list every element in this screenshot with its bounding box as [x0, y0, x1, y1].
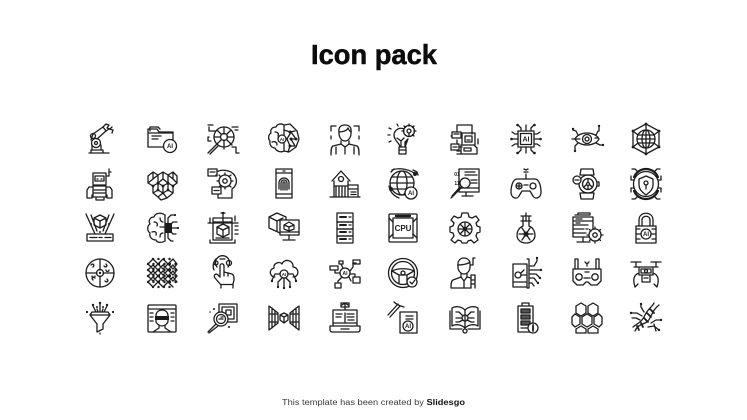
icon: globe web: [632, 123, 660, 155]
icon: AI hub: AI: [342, 271, 348, 277]
icon: hexagon cells: [572, 303, 602, 333]
icon: magnifier over chip: [208, 304, 237, 333]
icon: phone fingerprint: [276, 169, 292, 198]
icon: lightbulb with gear: [388, 124, 416, 154]
icon: AI book: [450, 307, 480, 333]
icon: half brain circuit: [148, 213, 179, 242]
icon: drone remote: [573, 259, 601, 285]
icon: AI padlock: AI: [643, 232, 649, 238]
icon: cube and monitor: [269, 213, 299, 240]
icon: dot mesh: [148, 259, 177, 287]
icon: robot: [87, 169, 112, 200]
icon: cube with data wings: [269, 306, 299, 330]
icon: hexagon mesh: [148, 172, 177, 200]
icon: AI folder: AI: [167, 144, 173, 150]
icon: AI padlock: [636, 213, 656, 243]
icon: person with antenna: [451, 258, 475, 288]
icon: brain with mesh: AI: [280, 137, 284, 142]
icon: shield circuit: [631, 169, 661, 199]
icon: VR person screen: [148, 305, 176, 332]
icon: 3D printer: [208, 212, 238, 243]
icon: flask with network: [517, 213, 535, 243]
icon: AI cloud: [270, 260, 298, 289]
icon: face scan: [331, 125, 359, 155]
icon: server rack: [337, 213, 353, 243]
icon: AI chip: [510, 124, 542, 154]
icon: AI file with pickaxe: AI: [405, 324, 411, 330]
title: Icon pack: [311, 39, 438, 70]
icon: DNA circuit: [630, 303, 662, 331]
icon: CPU: CPU: [395, 224, 412, 233]
icon: gamepad: [511, 169, 541, 198]
footer credit: This template has been created by Slidesgo: [282, 398, 465, 407]
icon: circular puzzle: [86, 259, 114, 287]
icon: head with gear: [208, 169, 236, 198]
icon: AI file with pickaxe: [388, 302, 417, 333]
icon: robot arm: [89, 124, 113, 153]
icon: AI hub: [330, 260, 360, 288]
icon: battery: [518, 303, 538, 333]
icon: AI chip: AI: [522, 136, 530, 144]
icon: AI globe: [389, 169, 418, 199]
icon: AI folder: [148, 127, 176, 152]
icon: CPU: [389, 214, 417, 242]
icon: robot with screens: [451, 125, 478, 154]
icon: drone: [631, 262, 661, 287]
icon: tablet circuit: [513, 257, 542, 288]
icon: AI cloud: AI: [282, 272, 286, 277]
icon: magnifier over network wheel: [208, 125, 239, 154]
icon: smartwatch: [573, 169, 599, 199]
icon: binary monitor with magnifier: [451, 169, 479, 198]
icon: eye circuit: [572, 125, 604, 152]
icon: steering wheel: [388, 258, 418, 288]
icon: smart house: [330, 171, 360, 197]
icon: touch hand: [213, 256, 234, 288]
icon: hologram cube: [86, 214, 114, 241]
icon: laptop with upload: [330, 303, 360, 332]
icon: binary monitor with magnifier: 01: [454, 172, 460, 178]
icon: brain with mesh: [269, 124, 299, 152]
icon: data funnel: [86, 302, 114, 334]
icon: binary monitor with magnifier: 11: [454, 181, 460, 187]
icon: AI globe: AI: [408, 191, 414, 197]
icon: gear with network: [450, 213, 480, 243]
icon: server monitor gear: [573, 213, 603, 243]
